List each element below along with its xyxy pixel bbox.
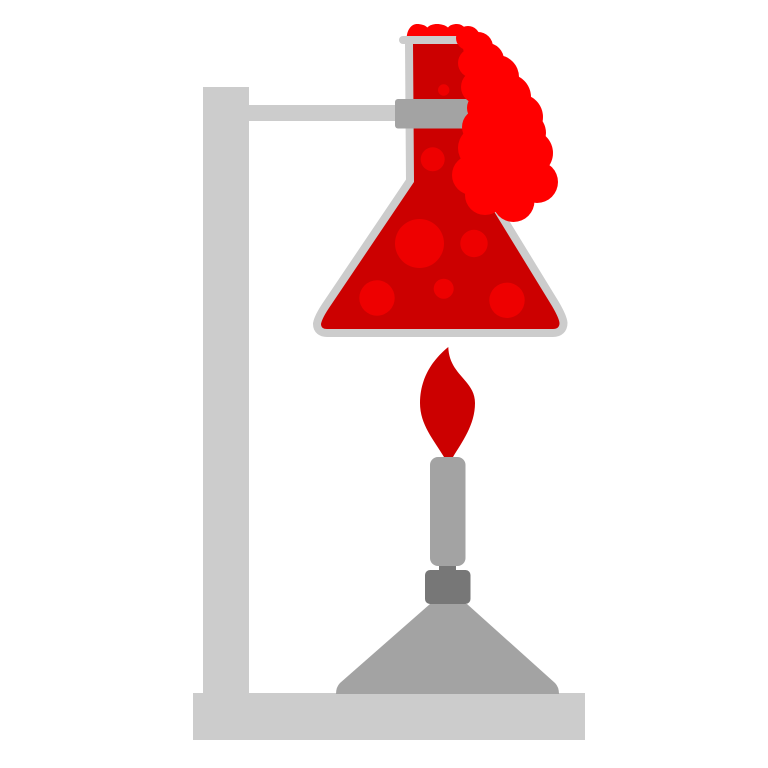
overflowing foam bbox=[452, 26, 558, 222]
burner base bbox=[336, 604, 559, 694]
flask liquid bbox=[321, 44, 560, 329]
bunsen burner bbox=[336, 457, 559, 694]
burner collar bbox=[425, 570, 470, 604]
retort stand bbox=[193, 87, 585, 740]
flask rim bbox=[399, 36, 469, 44]
burner tube bbox=[430, 457, 466, 566]
flame bbox=[420, 347, 475, 457]
liquid bubbles bbox=[359, 84, 525, 318]
foam at the flask mouth bbox=[407, 24, 470, 44]
flask glass outline bbox=[321, 44, 560, 329]
flask clamp bbox=[395, 99, 485, 128]
burner neck bbox=[439, 564, 456, 572]
